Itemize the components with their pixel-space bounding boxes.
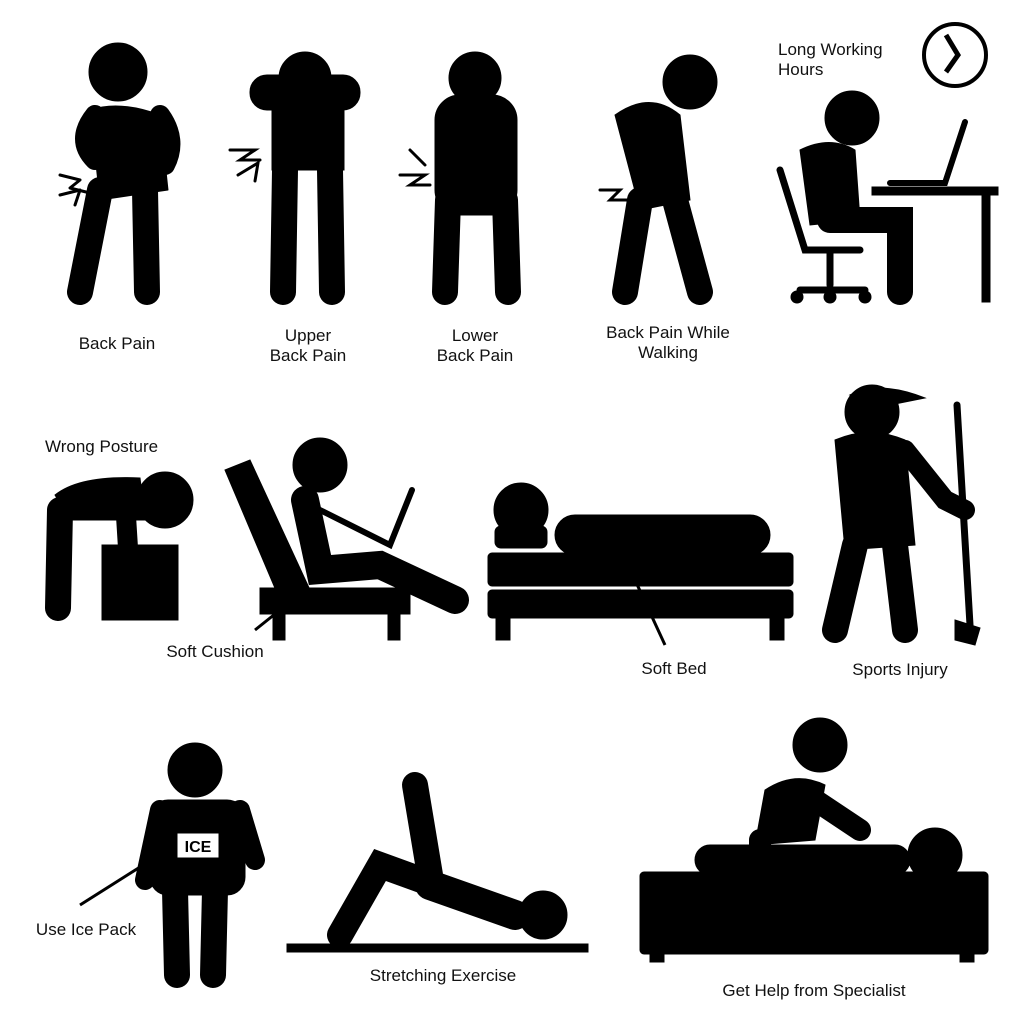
figure: ice pack bbox=[145, 743, 255, 975]
figure: specialist massage bbox=[640, 718, 988, 962]
arrow: soft cushion bbox=[255, 590, 305, 630]
figure: wrong posture bbox=[55, 472, 193, 620]
labels row 1: Upper bbox=[285, 326, 331, 345]
arrow: ice pack bbox=[80, 862, 148, 905]
figure: upper back pain bbox=[230, 52, 360, 292]
label: Get Help from Specialist: Get Help from Specialist bbox=[722, 981, 906, 1000]
labels row 1: Back Pain bbox=[79, 334, 155, 353]
label: Soft Bed: Soft Bed bbox=[641, 659, 707, 678]
figure: desk worker bbox=[780, 91, 998, 303]
labels row 1: Back Pain bbox=[437, 346, 513, 365]
labels row 1: Back Pain bbox=[270, 346, 346, 365]
label: Soft Cushion: Soft Cushion bbox=[166, 642, 264, 661]
label: Long Working Hours: Long Working bbox=[778, 40, 883, 59]
figure: reclining on chair bbox=[225, 438, 455, 640]
label: Stretching Exercise: Stretching Exercise bbox=[370, 966, 516, 985]
labels row 1 bbox=[79, 323, 730, 365]
label: Wrong Posture: Wrong Posture bbox=[45, 437, 158, 456]
labels row 1: Back Pain While bbox=[606, 323, 730, 342]
arrow: soft bed bbox=[635, 580, 665, 645]
label: Long Working Hours bbox=[778, 40, 883, 79]
figure: ice pack: ICE bbox=[185, 839, 212, 856]
figure: lower back pain bbox=[400, 52, 517, 292]
label: Sports Injury: Sports Injury bbox=[852, 660, 948, 679]
labels row 1: Lower bbox=[452, 326, 498, 345]
icon: clock bbox=[924, 24, 986, 86]
label: Long Working Hours: Hours bbox=[778, 60, 823, 79]
figure: back pain bbox=[60, 43, 170, 292]
figure: soft bed bbox=[488, 483, 793, 640]
figure: sports injury bbox=[835, 385, 980, 645]
labels row 1: Walking bbox=[638, 343, 698, 362]
figure: stretching exercise bbox=[287, 785, 588, 952]
label: Use Ice Pack: Use Ice Pack bbox=[36, 920, 137, 939]
figure: back pain while walking bbox=[600, 55, 717, 292]
